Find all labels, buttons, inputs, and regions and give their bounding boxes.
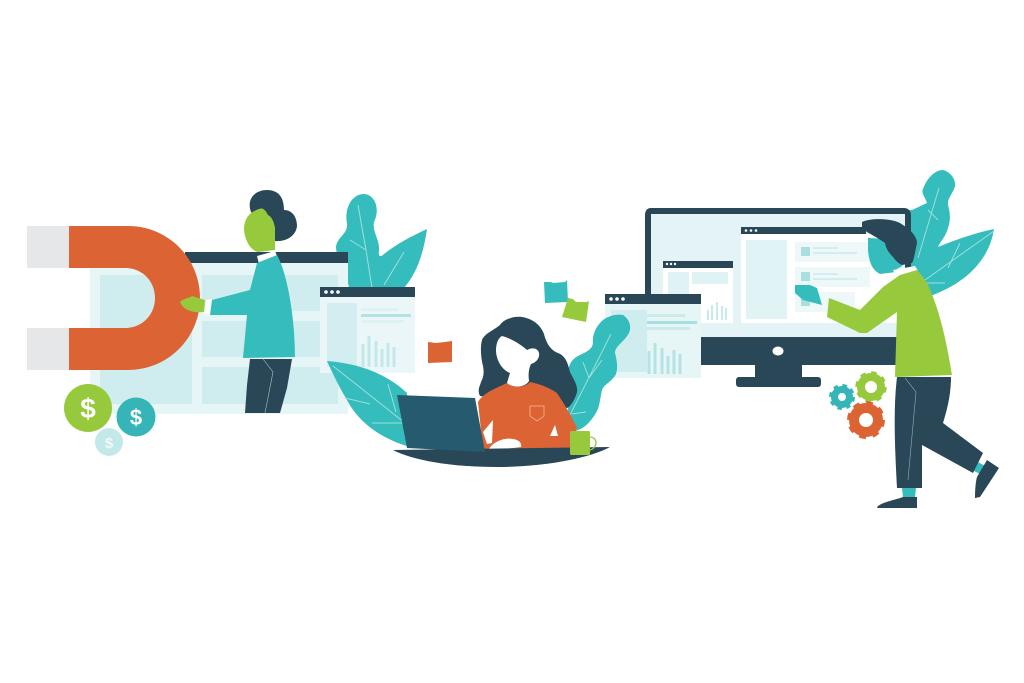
window with chart, left [320, 287, 415, 373]
hair [250, 190, 297, 241]
browser panel left [90, 252, 348, 414]
person pulling magnet [180, 190, 297, 413]
cuff [204, 299, 212, 315]
head [868, 238, 907, 274]
coin: teal [116, 398, 156, 436]
sticky note orange [428, 341, 452, 363]
face [244, 209, 275, 252]
small window in monitor [663, 261, 733, 323]
person at monitor [795, 219, 999, 508]
socks [902, 461, 987, 497]
plant behind left window [336, 194, 427, 288]
collar [893, 266, 918, 278]
hand [795, 285, 822, 305]
sweater [827, 270, 952, 377]
gear teal [830, 386, 854, 408]
coin: pale [95, 428, 123, 456]
leaf right of woman [566, 315, 630, 431]
plant behind monitor [905, 170, 994, 300]
trousers [245, 359, 292, 413]
laptop [397, 395, 485, 452]
torso and arm [210, 255, 295, 358]
table [393, 447, 610, 467]
coin: pale: $ [105, 435, 114, 452]
gear orange [849, 403, 883, 437]
hand [180, 296, 205, 312]
mug [570, 431, 596, 455]
gear green [857, 373, 885, 401]
pocket [530, 406, 544, 421]
shoes [877, 460, 999, 508]
leaf left of laptop [327, 361, 410, 447]
sweater [478, 382, 577, 449]
collar [257, 251, 277, 264]
face and neck [496, 336, 539, 387]
hand [489, 439, 521, 451]
large window in monitor [741, 227, 898, 323]
window with chart, middle [605, 294, 701, 378]
hair [479, 317, 577, 408]
trousers [895, 377, 983, 488]
woman at laptop [478, 317, 577, 451]
monitor [645, 208, 911, 387]
coin: large green: $ [80, 393, 96, 424]
magnet [27, 226, 200, 370]
hair [862, 219, 917, 265]
coin: large green [64, 384, 112, 432]
sticky note teal [544, 280, 568, 303]
arm gaps [483, 420, 558, 444]
sticky note green [562, 298, 589, 322]
coin: teal: $ [130, 405, 142, 430]
